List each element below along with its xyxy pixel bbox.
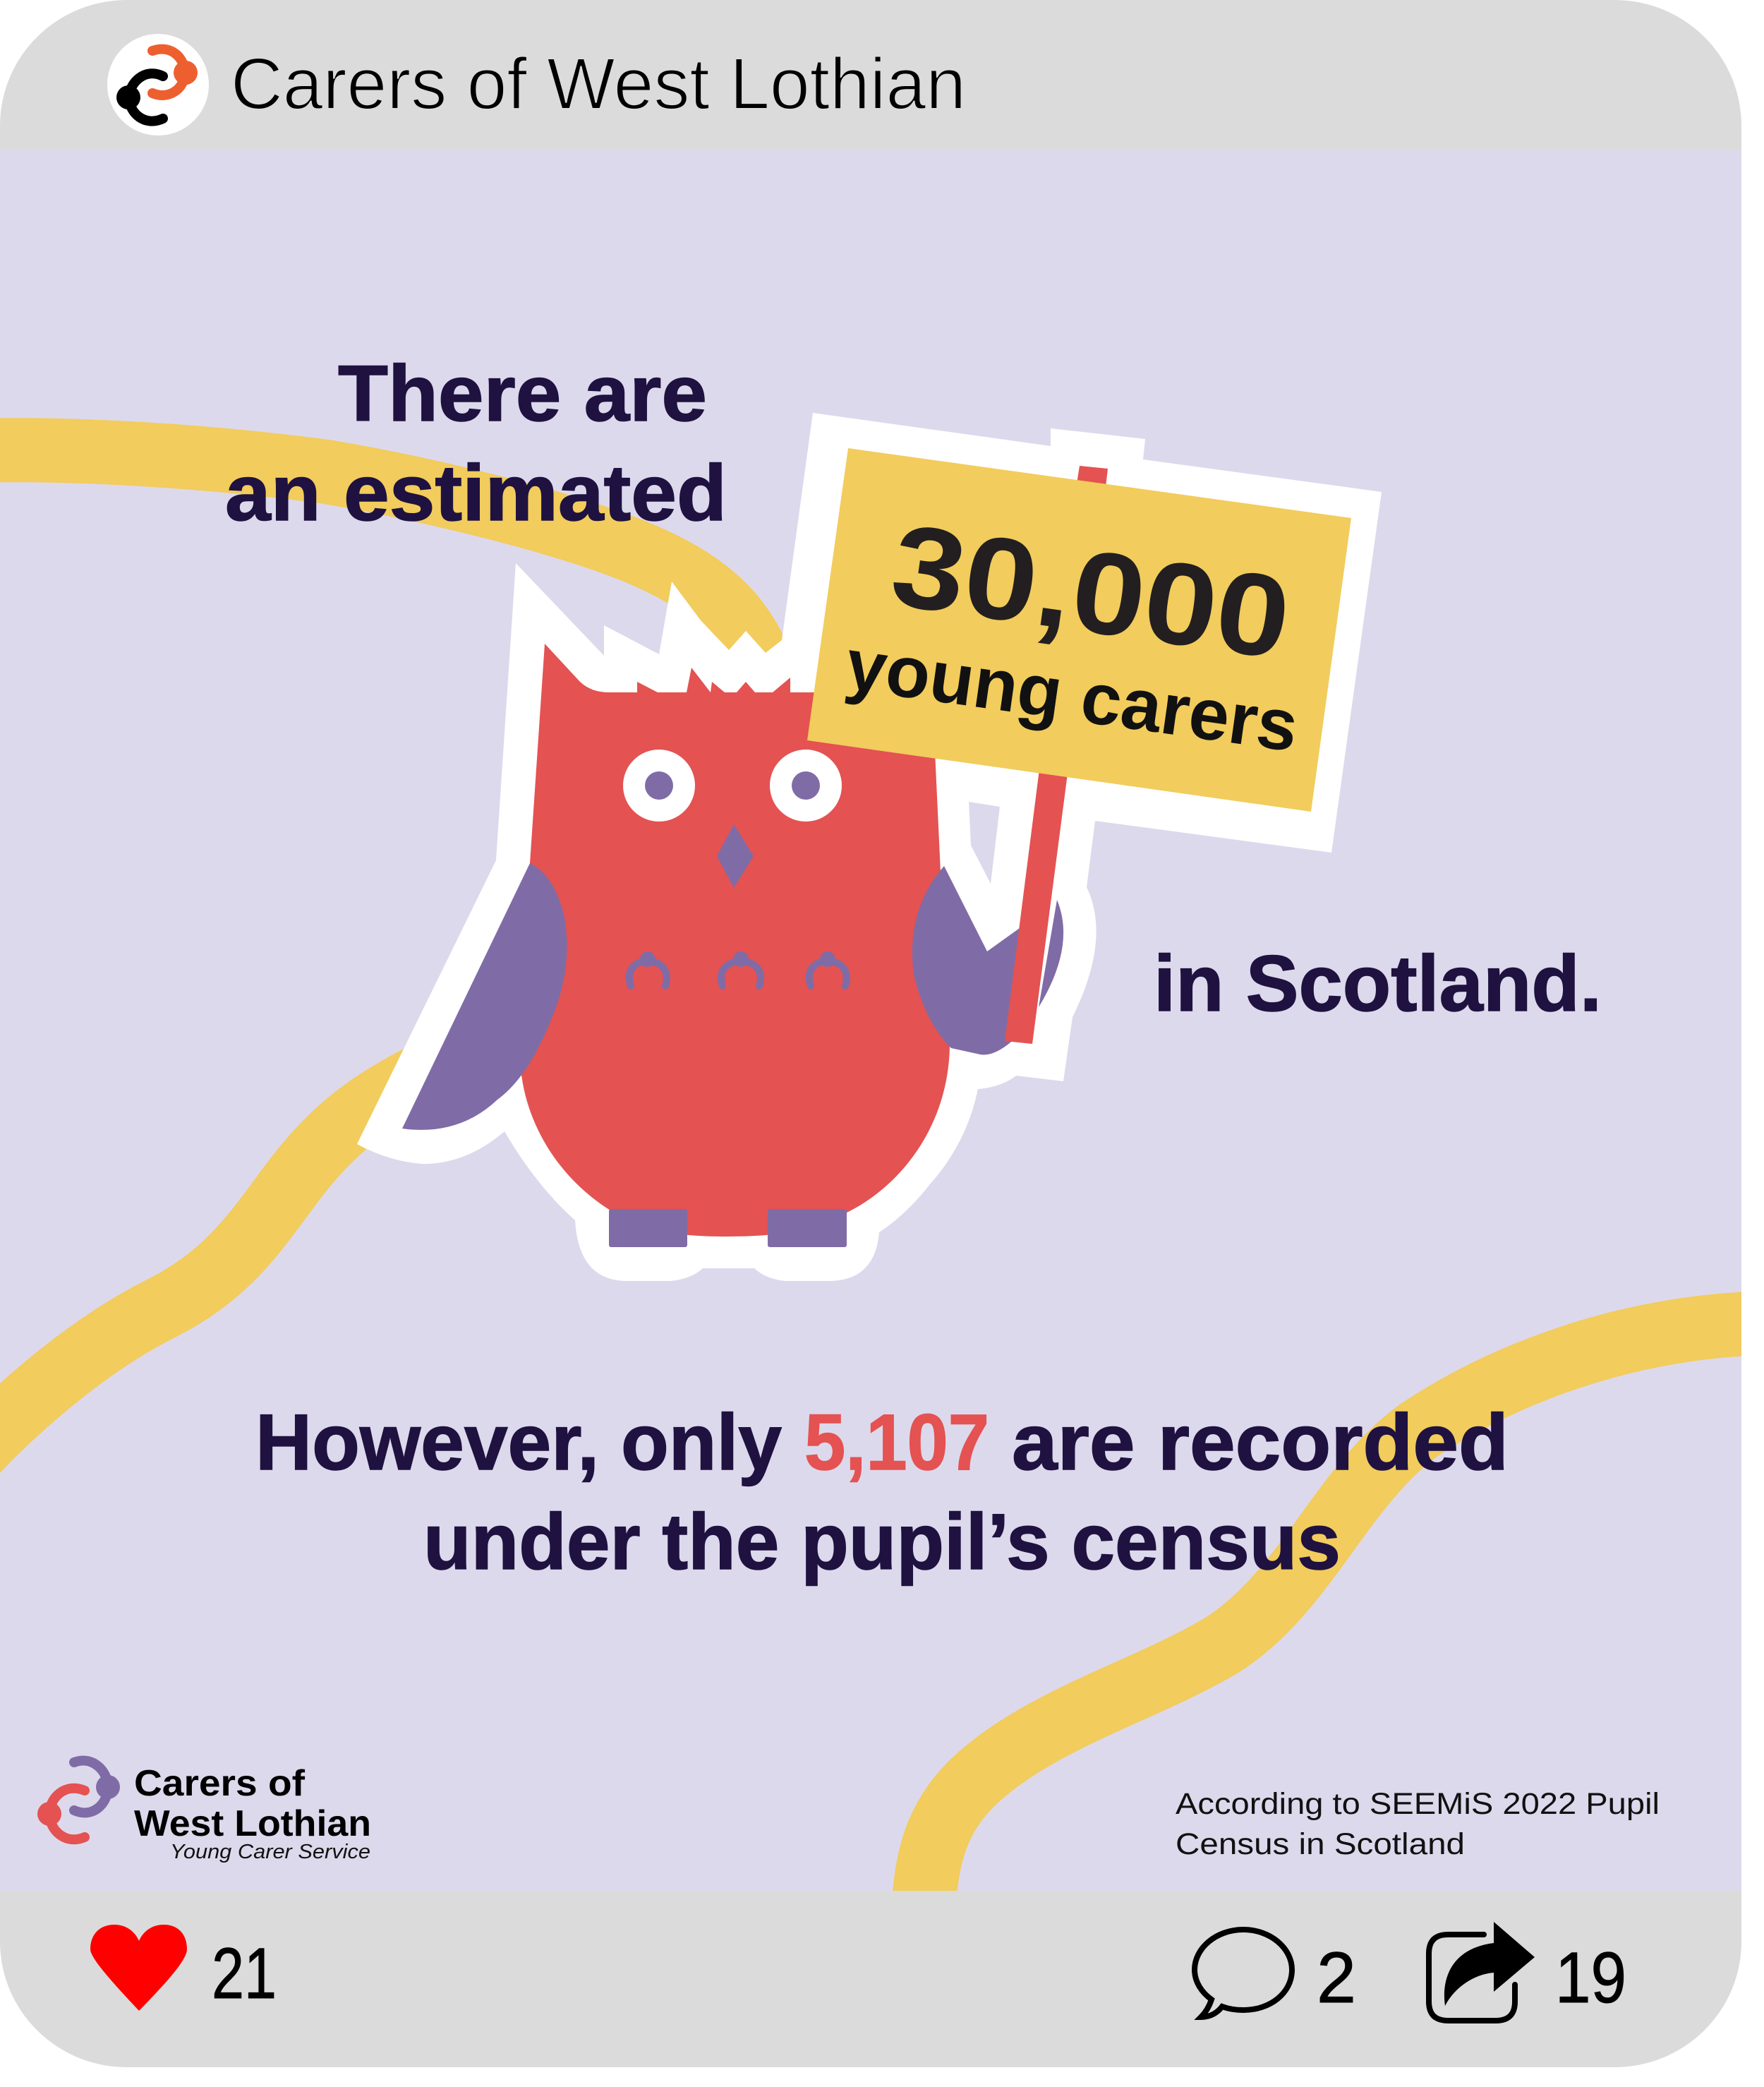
text: census statement: are recorded [1012,1398,1509,1486]
footer logo wordmark: Young Carer Service [170,1841,370,1863]
decorative yellow ribbons [0,450,1757,1906]
text: census statement [255,1398,1509,1586]
sign text: 30,000 [884,499,1298,683]
text: intro: an estimated [225,449,727,537]
text: census statement: under the pupil’s census [423,1498,1341,1586]
sign board [807,448,1351,812]
footer logo wordmark: West Lothian [134,1803,371,1844]
beak [717,824,754,888]
shares count: 19 [1555,1937,1626,2018]
sign pole [1005,769,1068,1044]
footer logo: Young Carer Service [37,1761,371,1863]
icon: footer logo mark [37,1761,120,1839]
text: intro: There are [338,349,707,438]
text: in Scotland: in Scotland. [1154,939,1602,1028]
header bar: brand [107,34,966,136]
icon: header logo [107,34,209,136]
gap between wing and sign [969,802,1000,884]
owl body [521,644,950,1237]
comments count: 2 [1317,1937,1356,2018]
chest feathers [629,951,847,986]
icon: share arrow [1429,1922,1535,2021]
source note [1176,1787,1660,1861]
header title: Carers of West Lothian [231,43,966,124]
eyes [623,750,842,822]
text: census statement: 5,107 [804,1398,989,1486]
footer logo wordmark [134,1763,371,1863]
source note: According to SEEMiS 2022 Pupil [1176,1787,1660,1821]
sign text: young carers [841,623,1303,767]
pole top [1077,466,1108,487]
icon: comment bubble [1195,1930,1292,2017]
source note: Census in Scotland [1176,1827,1465,1861]
feet [609,1209,847,1247]
sign text [841,499,1303,767]
likes count: 21 [212,1933,277,2014]
left wing [402,863,567,1130]
text: intro [225,349,727,537]
white sticker outline [357,413,1382,1281]
icon: heart [90,1925,187,2011]
text: census statement: However, only [255,1398,782,1486]
right wing [912,866,1063,1054]
owl holding sign illustration [357,413,1382,1281]
footer logo wordmark: Carers of [134,1763,306,1804]
